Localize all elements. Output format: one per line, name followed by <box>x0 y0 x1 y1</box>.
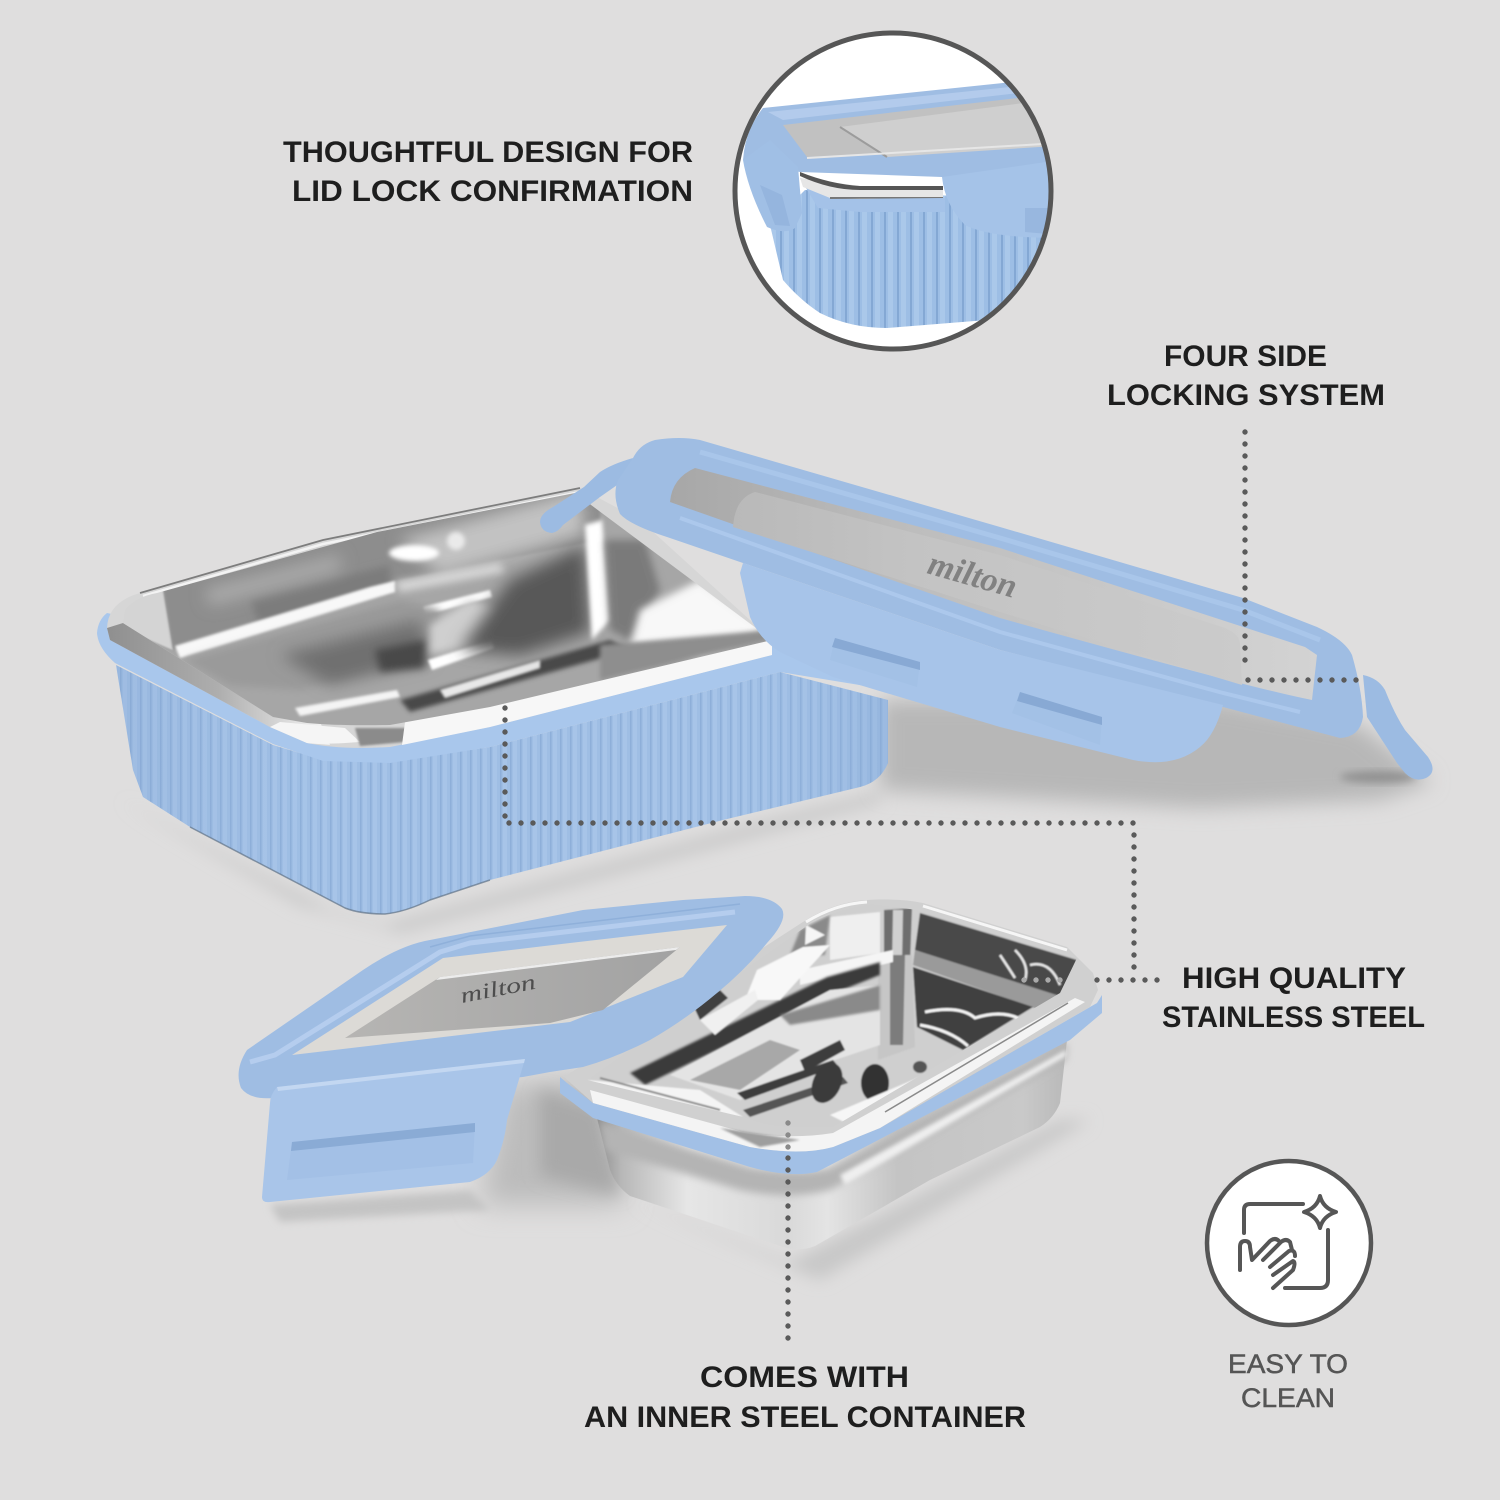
small container steel rim <box>564 899 1098 1152</box>
heading: lid lock confirmation: THOUGHTFUL DESIGN FOR <box>283 136 693 169</box>
heading: four side locking system <box>1107 340 1385 412</box>
large box steel interior <box>123 493 766 726</box>
small lid frame <box>239 896 783 1098</box>
icon: easy to clean <box>1207 1161 1371 1325</box>
zoom lid frame <box>743 82 1046 177</box>
large lid front latch <box>740 563 1223 762</box>
heading: high quality stainless steel: STAINLESS STEEL <box>1162 1001 1425 1034</box>
zoom steel lid panel <box>783 98 1022 157</box>
dotted leader: inner container <box>785 1158 791 1350</box>
dotted leader: four side locking <box>1245 432 1358 680</box>
heading: lid lock confirmation: LID LOCK CONFIRMATION <box>292 175 693 208</box>
large box ribbed body <box>116 665 888 914</box>
small lid raised panel <box>345 947 680 1038</box>
dotted leader: inner container faint section <box>785 1123 791 1148</box>
heading: high quality stainless steel <box>1162 962 1425 1034</box>
zoom circle outline <box>735 33 1051 349</box>
zoom ribbed body <box>770 190 1060 328</box>
dotted leader: stainless steel faint section <box>1024 977 1064 983</box>
large lid raised panel <box>733 492 1242 685</box>
heading: four side locking system: LOCKING SYSTEM <box>1107 379 1385 412</box>
dotted leader: stainless steel <box>505 708 1158 980</box>
small lid steel panel <box>292 925 727 1055</box>
zoom left clip <box>743 160 802 231</box>
small container blue band <box>560 995 1102 1174</box>
large lid steel panel <box>670 468 1317 700</box>
large lid outer frame <box>615 438 1363 738</box>
small container interior reflections <box>589 908 1076 1122</box>
heading: inner steel container: COMES WITH <box>700 1361 909 1394</box>
large box shadows <box>120 700 1432 932</box>
zoom steel strip <box>800 178 943 199</box>
small inner steel container <box>239 890 1102 1280</box>
zoom right clip <box>942 177 1042 238</box>
small container shadow <box>270 1075 1090 1280</box>
heading: inner steel container <box>584 1361 1026 1434</box>
heading: four side locking system: FOUR SIDE <box>1164 340 1327 373</box>
large box blue rim <box>97 613 890 763</box>
large lid right strap <box>1363 675 1433 780</box>
large lid left strap <box>540 458 633 533</box>
label: easy to clean <box>1228 1349 1348 1413</box>
large lunch box with open lid <box>97 438 1433 932</box>
zoom blue rim <box>800 178 945 212</box>
label: easy to clean: EASY TO <box>1228 1349 1348 1379</box>
small lid tab <box>262 1059 525 1202</box>
large lid logo: milton <box>924 545 1021 606</box>
small container steel body <box>597 1010 1098 1249</box>
heading: high quality stainless steel: HIGH QUALITY <box>1182 962 1406 995</box>
callout: lid lock zoom circle <box>735 33 1070 349</box>
heading: lid lock confirmation <box>283 136 693 208</box>
heading: inner steel container: AN INNER STEEL CONTAINER <box>584 1401 1026 1434</box>
label: easy to clean: CLEAN <box>1241 1383 1335 1413</box>
large box steel rim <box>107 488 772 748</box>
small lid logo: milton <box>458 969 538 1008</box>
